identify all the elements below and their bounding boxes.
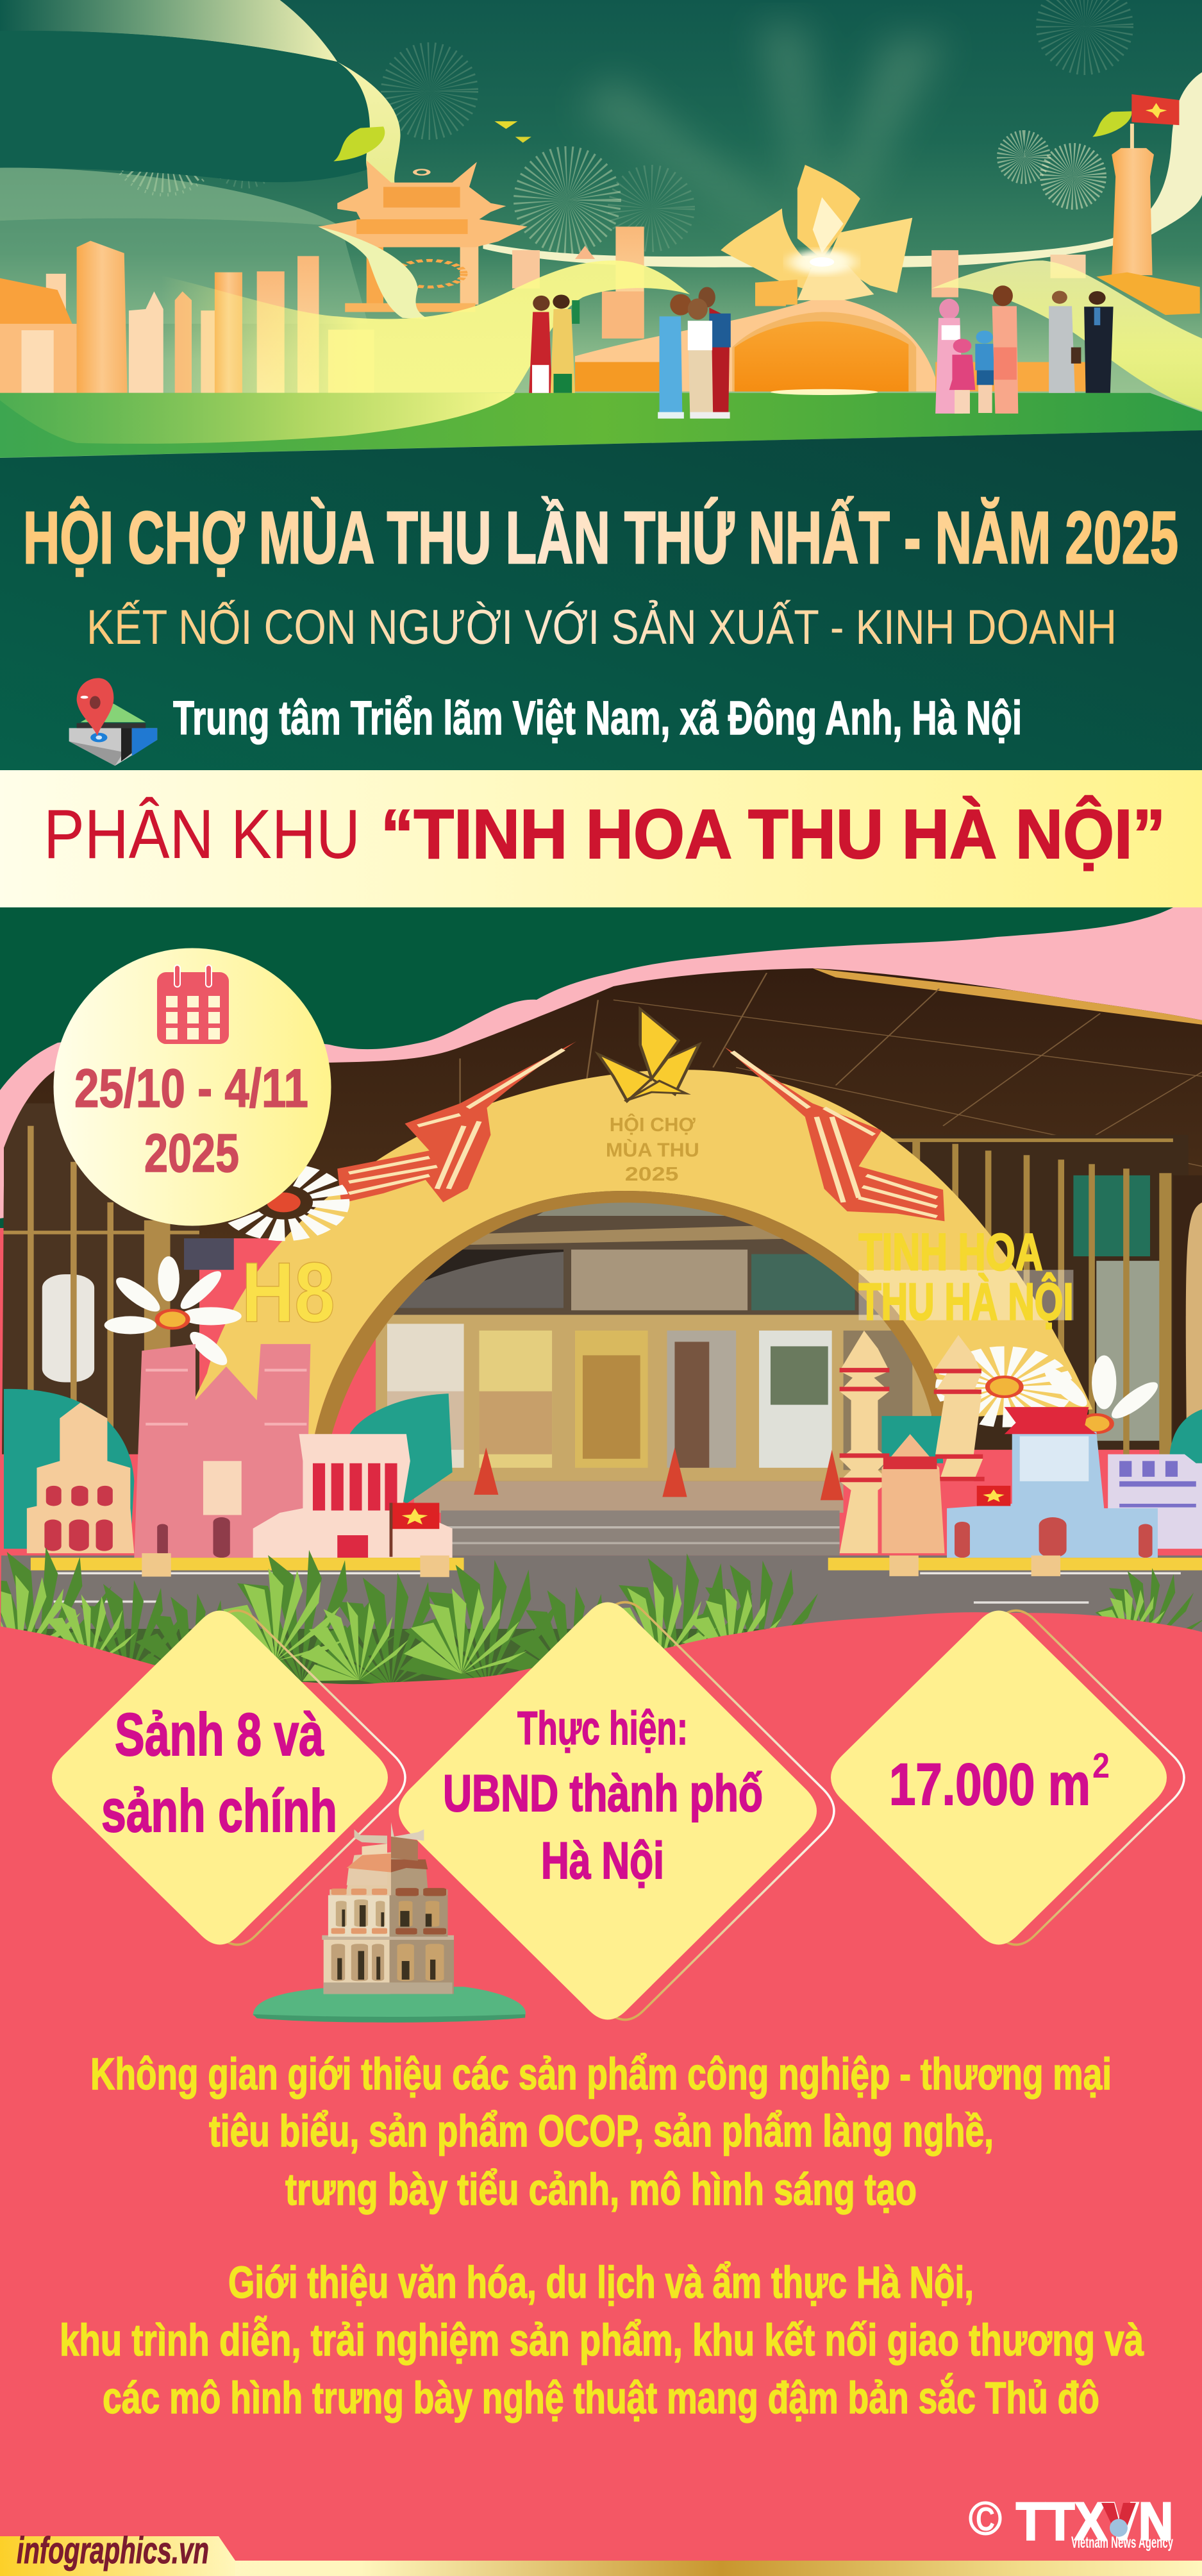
left glass facade bbox=[0, 1104, 199, 1454]
hero artwork in scaled coordinates bbox=[0, 0, 1202, 458]
banner heading bold part: “TINH HOA THU HÀ NỘI” bbox=[381, 795, 1165, 873]
description paragraph 1 bbox=[90, 2049, 1112, 2214]
leaf displays bbox=[4, 1389, 134, 1549]
top-left ribbon bbox=[0, 0, 337, 62]
arch logo star flower bbox=[598, 1009, 699, 1101]
dark swoosh bbox=[0, 31, 392, 182]
event photo illustration: MÙA THU bbox=[606, 1138, 699, 1161]
footer tab bbox=[0, 2530, 235, 2576]
model: water tower bbox=[27, 1402, 134, 1553]
people: women in ao dai bbox=[529, 294, 580, 393]
date text line 2: 2025 bbox=[144, 1123, 239, 1183]
upper storey bbox=[330, 1852, 391, 1895]
icon: Turtle Tower bbox=[253, 1822, 526, 2023]
pink wave bbox=[0, 907, 1202, 1218]
ribbon sash right bbox=[931, 260, 1202, 410]
background: red lower panel bbox=[0, 1539, 1202, 2576]
middle storey bbox=[328, 1895, 391, 1937]
left wing decoration bbox=[337, 1041, 576, 1203]
temple gate bbox=[318, 160, 528, 312]
floor and steps bbox=[414, 1481, 844, 1513]
ceiling bbox=[0, 959, 1202, 1238]
area text: 17.000 m bbox=[889, 1752, 1090, 1817]
icon: Vietnamese flag bbox=[1131, 94, 1179, 125]
date circle bbox=[54, 948, 331, 1226]
model: blue colonial buildings bbox=[947, 1407, 1202, 1558]
dark green title panel bbox=[0, 430, 1202, 770]
daisies bbox=[104, 1174, 1165, 1433]
ribbon down bbox=[337, 62, 401, 184]
diamond: area: 2 bbox=[1092, 1746, 1110, 1785]
icon: calendar bbox=[157, 965, 229, 1044]
arch ribbon bbox=[483, 72, 1202, 267]
banner heading regular part: PHÂN KHU bbox=[44, 795, 360, 873]
description paragraph 1: trưng bày tiểu cảnh, mô hình sáng tạo bbox=[285, 2164, 917, 2214]
golden star flower bbox=[721, 165, 912, 305]
description paragraph 2 bbox=[60, 2257, 1144, 2423]
event photo illustration: 2025 bbox=[625, 1163, 678, 1185]
people: businessmen bbox=[1049, 290, 1114, 393]
diamond: organiser: UBND thành phố bbox=[443, 1765, 763, 1823]
model: Ho Chi Minh mausoleum bbox=[253, 1434, 453, 1558]
skyline buildings bbox=[0, 226, 1086, 393]
temple ribbon bbox=[318, 226, 430, 319]
footer tab: infographics.vn bbox=[17, 2530, 209, 2572]
top bbox=[362, 1844, 387, 1855]
icon: map location pin bbox=[69, 678, 157, 766]
dome hall bbox=[575, 296, 1089, 391]
H8 sign: H8 bbox=[242, 1245, 335, 1340]
organiser text: Thực hiện: bbox=[517, 1703, 688, 1755]
green panel behind photo bbox=[0, 907, 1202, 1228]
diamond: hall bbox=[52, 1611, 405, 1944]
right glass facade bbox=[866, 1135, 1189, 1450]
light rays bbox=[581, 15, 946, 214]
ribbon sash on ground bbox=[0, 393, 515, 444]
diamond: organiser bbox=[399, 1602, 834, 2020]
ribbon sash over city bbox=[153, 260, 690, 393]
mound bbox=[253, 1987, 526, 2022]
date text line 1: 25/10 - 4/11 bbox=[74, 1058, 308, 1118]
traffic cones bbox=[474, 1447, 844, 1500]
section banner bbox=[0, 770, 1202, 907]
logo: TTXVN: C bbox=[976, 2501, 995, 2538]
lower storey bbox=[324, 1938, 391, 1994]
logo: TTXVN: TTXVN bbox=[1016, 2491, 1173, 2551]
glow on ground bbox=[771, 389, 878, 395]
description paragraph 2: Giới thiệu văn hóa, du lịch và ẩm thực Hà Nội, bbox=[228, 2257, 974, 2307]
diamond: hall: sảnh chính bbox=[101, 1777, 337, 1844]
right wing decoration bbox=[724, 1047, 944, 1221]
interior above doors bbox=[376, 1188, 931, 1481]
road bbox=[0, 1556, 1202, 1699]
sign: Tinh Hoa Thu Hà Nội bbox=[859, 1223, 1073, 1330]
diamond: area bbox=[831, 1611, 1184, 1944]
ground bbox=[0, 393, 1202, 458]
model: St Joseph cathedral bbox=[134, 1344, 310, 1558]
left soft wave bbox=[0, 168, 341, 226]
leaves bbox=[333, 126, 385, 162]
people: family bbox=[935, 285, 1018, 414]
fireworks bbox=[108, 2, 1109, 230]
model: pagoda towers bbox=[840, 1331, 985, 1553]
hall text: Sảnh 8 và bbox=[115, 1701, 324, 1768]
golden arch bbox=[176, 1070, 1092, 1436]
event photo illustration bbox=[0, 959, 1202, 1699]
plants bbox=[0, 1547, 1202, 1693]
model bases bbox=[31, 1553, 1202, 1577]
hero illustration bbox=[0, 0, 1202, 462]
sign plate bbox=[859, 1270, 1073, 1320]
glass doors bbox=[376, 1315, 931, 1481]
flag tower bbox=[1096, 94, 1200, 315]
people: selfie group bbox=[658, 287, 731, 419]
diamond: organiser: Hà Nội bbox=[541, 1832, 664, 1890]
footer strip bbox=[0, 2561, 1202, 2576]
red wave panel bbox=[0, 1612, 1202, 2576]
arch text: HỘI CHỢ bbox=[610, 1113, 696, 1136]
